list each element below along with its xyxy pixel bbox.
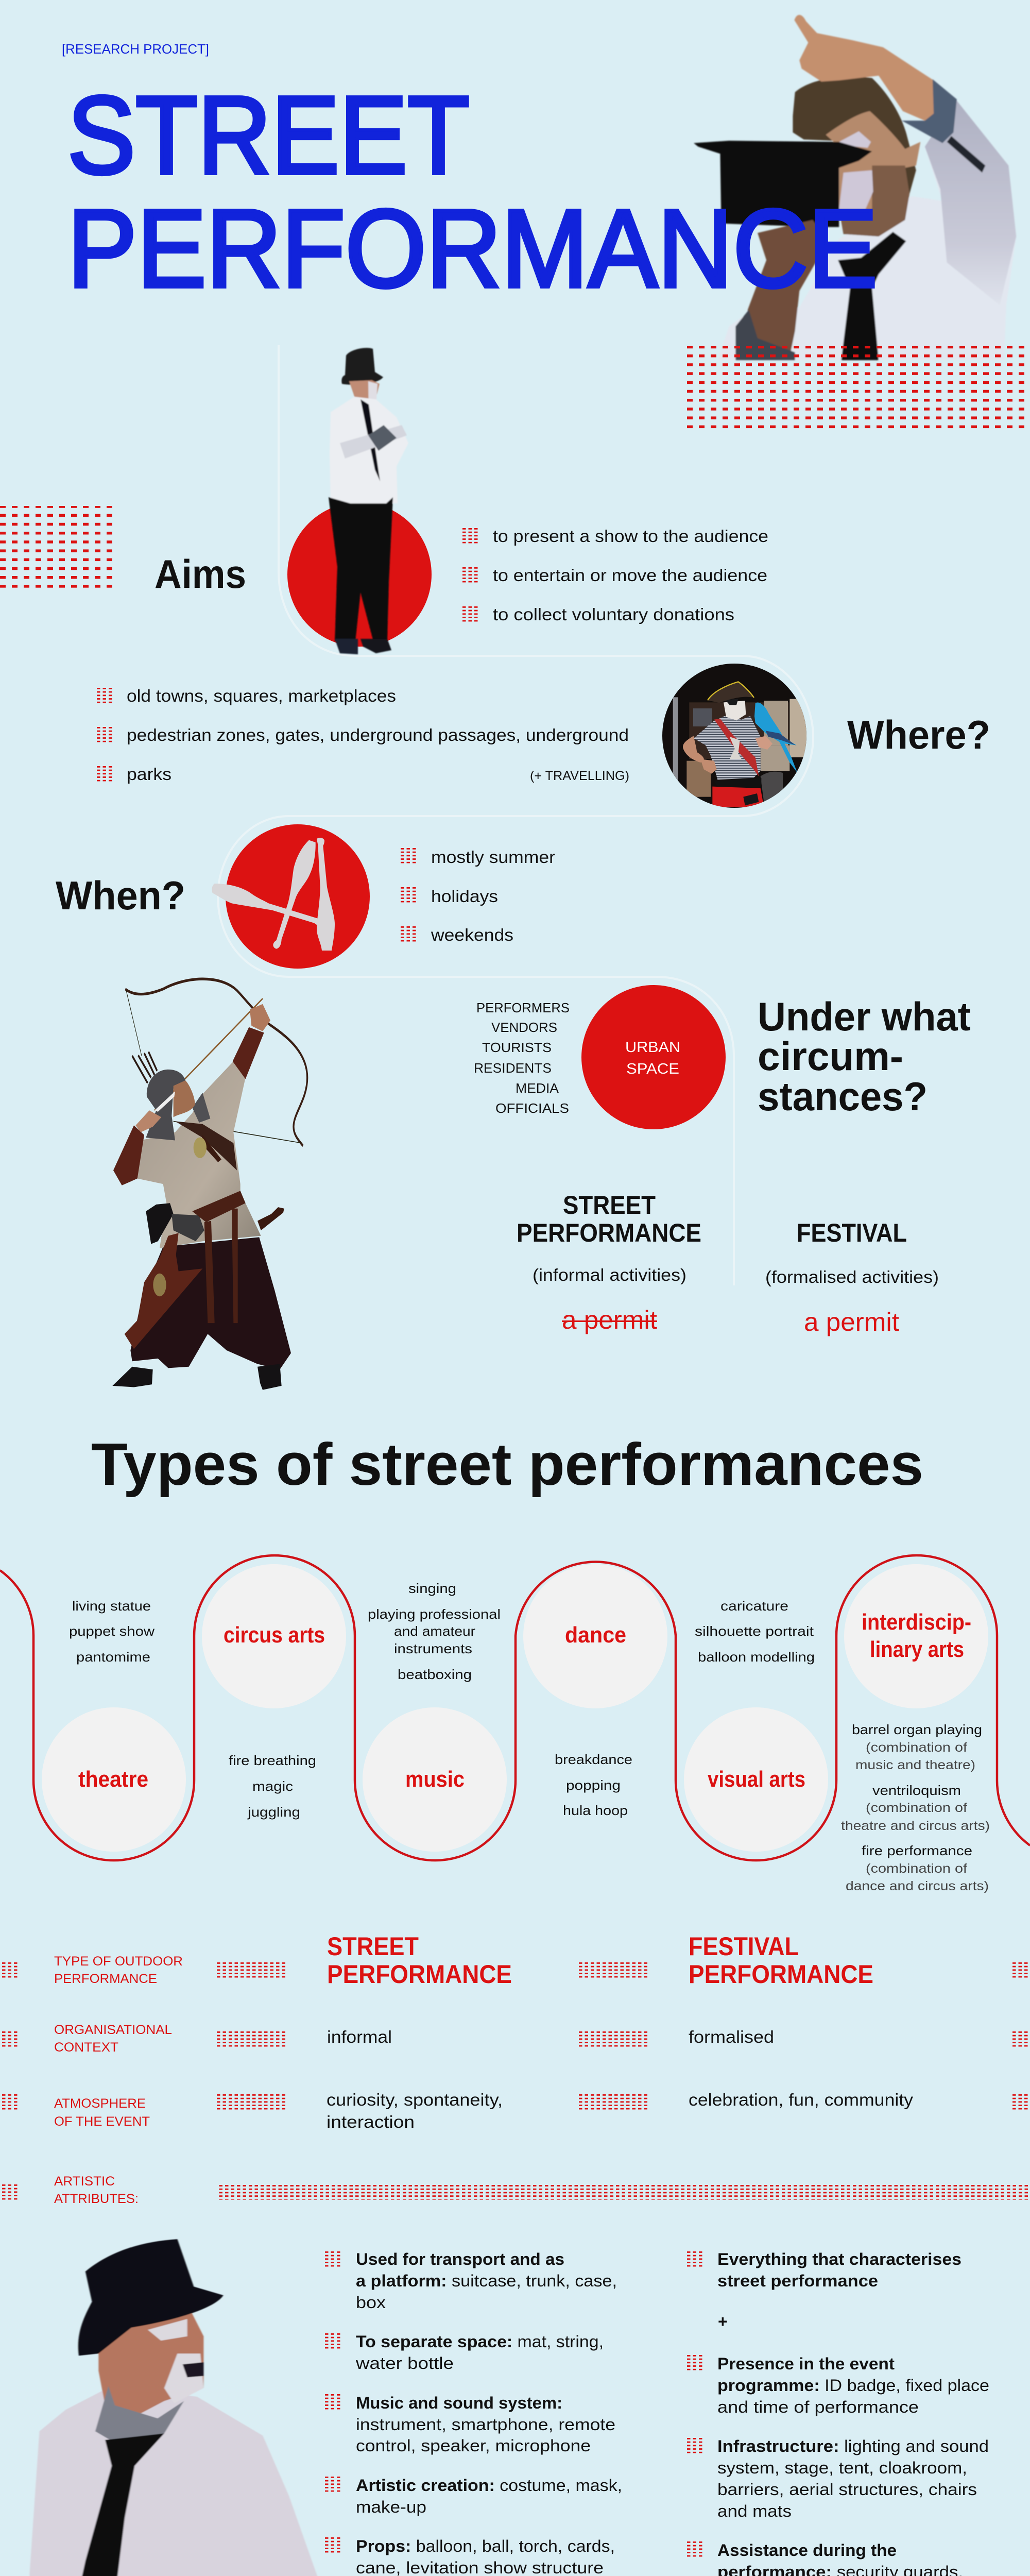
circle: interdisciplinary arts [844,1564,988,1708]
dot pattern: aims [0,506,112,589]
column: street performance [517,1191,701,1334]
list: dance examples: breakdance [555,1752,632,1767]
icon: juggling clubs [212,838,335,951]
circle: interdisciplinary arts: linary arts [870,1637,964,1662]
title: PERFORMANCE [67,187,878,310]
list: street performance artistic attributes: Props: balloon, ball, torch, cards, [356,2537,615,2555]
list: interdisciplinary examples: (combination of [866,1740,967,1755]
heading: aims: Aims [154,551,246,597]
circle: circus arts: circus arts [224,1622,325,1648]
row: atmosphere of the event: celebration, fun, community [689,2090,914,2109]
list: street performance artistic attributes: Artistic creation: costume, mask, [356,2476,622,2495]
list: when: weekends [431,925,513,944]
list: street performance artistic attributes: instrument, smartphone, remote [356,2415,615,2434]
list: music examples: and amateur [394,1623,475,1639]
heading: types of street performances: Types of street performances [91,1431,923,1498]
list: interdisciplinary examples [841,1722,990,1893]
list: festival performance attributes: and mats [717,2502,792,2520]
row: organisational context [2,2023,1028,2055]
list: interdisciplinary examples: music and theatre) [855,1758,975,1772]
panel: when [56,824,555,969]
list: festival performance attributes: Presence in the event [717,2354,895,2373]
list: visual arts examples: balloon modelling [698,1649,815,1665]
list: interdisciplinary examples: barrel organ playing [852,1722,982,1737]
heading: under what circumstances: circum- [758,1033,903,1079]
row: atmosphere of the event: OF THE EVENT [54,2114,150,2129]
list: visual arts examples: caricature [720,1598,788,1614]
row: artistic attributes: ARTISTIC [54,2174,115,2189]
list: street performance artistic attributes: box [356,2293,386,2312]
list: festival performance attributes: programme: ID badge, fixed place [717,2376,989,2395]
list: street performance artistic attributes: make-up [356,2498,426,2516]
list: theatre examples: pantomime [76,1649,150,1665]
list: urban space actors: MEDIA [516,1080,559,1096]
list: street performance artistic attributes: a platform: suitcase, trunk, case, [356,2272,617,2290]
list: street performance artistic attributes: To separate space: mat, string, [356,2332,604,2351]
column: festival: FESTIVAL [797,1218,907,1247]
list: interdisciplinary examples: dance and circus arts) [846,1879,989,1893]
list: theatre examples: living statue [72,1598,151,1614]
list: music examples: beatboxing [398,1667,472,1682]
list: when: holidays [431,887,498,906]
row: artistic attributes: ATTRIBUTES: [54,2192,139,2206]
red circle: urban space [581,985,726,1129]
row: atmosphere of the event: interaction [327,2112,415,2131]
list: aims: to entertain or move the audience [493,566,767,585]
list: where: parks [127,765,171,784]
list: interdisciplinary examples: (combination of [866,1861,967,1876]
row: organisational context: informal [327,2027,392,2046]
list: where [97,686,629,784]
panel: where [97,663,990,810]
red circle: urban space: SPACE [626,1061,679,1077]
photo: standing mime [329,348,408,654]
list: when [401,848,555,944]
list: music examples: instruments [394,1641,472,1656]
column: street performance: a permit [562,1306,657,1334]
list: urban space actors: PERFORMERS [476,1000,570,1015]
row: type of outdoor performance [2,1932,1028,1989]
list: festival performance attributes: and time of performance [717,2398,919,2416]
list: festival performance attributes: Everything that characterises [717,2250,962,2268]
list: street performance artistic attributes: water bottle [355,2354,454,2372]
list: music examples: playing professional [368,1606,501,1622]
row: atmosphere of the event: curiosity, spontaneity, [327,2090,503,2109]
list: dance examples [555,1752,632,1818]
panel: types diagram [0,1555,1030,1893]
list: dance examples: hula hoop [563,1803,628,1818]
list: music examples [368,1581,501,1682]
heading: where: Where? [847,712,990,757]
list: theatre examples [69,1598,154,1665]
list: interdisciplinary examples: ventriloquism [872,1783,961,1798]
dot pattern: top right [681,346,1030,429]
circle: dance: dance [565,1622,626,1648]
list: interdisciplinary examples: theatre and circus arts) [841,1819,990,1833]
circle: theatre: theatre [78,1767,148,1792]
list: urban space actors: OFFICIALS [495,1100,569,1116]
list: urban space actors [474,1000,570,1116]
circle: dance [523,1564,667,1708]
list: dance examples: popping [566,1777,621,1793]
list: when: mostly summer [431,848,555,867]
photo: mime looking away [29,2239,327,2576]
list: where: pedestrian zones, gates, underground passages, underground [127,725,629,744]
list: visual arts examples: silhouette portrait [695,1623,814,1639]
column: festival: a permit [804,1308,899,1336]
row: type of outdoor performance: PERFORMANCE [327,1960,512,1989]
heading: when: When? [56,873,185,918]
row: type of outdoor performance: STREET [327,1932,419,1961]
list: festival performance attributes: street performance [717,2272,878,2290]
photo: archer [112,979,307,1390]
list: street performance artistic attributes [325,2250,641,2576]
photo: performer with top hat [694,15,1016,360]
row: atmosphere of the event [2,2090,1028,2131]
row: organisational context: formalised [689,2027,774,2046]
list: visual arts examples [695,1598,815,1665]
list: festival performance attributes: Assistance during the [717,2541,897,2560]
row: type of outdoor performance: TYPE OF OUTDOOR [54,1954,183,1969]
list: festival performance attributes [687,2250,989,2576]
list: aims: to collect voluntary donations [493,605,734,624]
row: organisational context: ORGANISATIONAL [54,2023,172,2037]
list: where: old towns, squares, marketplaces [127,686,396,705]
list: festival performance attributes: system, stage, tent, cloakroom, [717,2459,967,2477]
list: urban space actors: TOURISTS [482,1040,552,1055]
list: urban space actors: RESIDENTS [474,1060,552,1076]
row: type of outdoor performance: PERFORMANCE [689,1960,873,1989]
list: interdisciplinary examples: fire performance [862,1843,972,1858]
row: artistic attributes [2,2174,1030,2206]
red circle: urban space: URBAN [625,1039,680,1056]
list: circus examples: fire breathing [229,1753,316,1768]
row: atmosphere of the event: ATMOSPHERE [54,2096,146,2111]
heading: under what circumstances: stances? [758,1074,928,1119]
circle: visual arts [684,1707,828,1852]
list: street performance artistic attributes: control, speaker, microphone [356,2436,591,2455]
title: STREET [67,73,470,197]
column: festival [765,1218,939,1336]
row: type of outdoor performance: FESTIVAL [689,1932,799,1961]
list: where: (+ TRAVELLING) [530,769,629,783]
list: aims [462,527,768,624]
red circle with juggling clubs [226,824,370,969]
row: type of outdoor performance: PERFORMANCE [54,1972,157,1986]
list: street performance artistic attributes: Music and sound system: [356,2394,562,2412]
list: festival performance attributes: + [718,2312,728,2331]
row: organisational context: CONTEXT [54,2040,118,2055]
circle: visual arts: visual arts [708,1767,805,1792]
heading: under what circumstances [758,994,971,1119]
list: circus examples [229,1753,316,1820]
circle: theatre [42,1707,186,1852]
list: music examples: singing [408,1581,456,1596]
panel: comparison table [2,1932,1030,2206]
circle: music: music [405,1767,465,1792]
red wave line [0,1555,1030,1860]
list: urban space actors: VENDORS [491,1020,557,1035]
column: street performance: (informal activities) [533,1265,686,1284]
small label: research project: [RESEARCH PROJECT] [62,41,209,57]
list: circus examples: magic [252,1778,293,1794]
list: festival performance attributes: barriers, aerial structures, chairs [717,2480,977,2499]
panel: aims [0,348,768,654]
column: festival: (formalised activities) [765,1267,939,1286]
list: circus examples: juggling [247,1804,300,1820]
red circle: aims [287,502,432,647]
list: festival performance attributes: Infrastructure: lighting and sound [717,2437,989,2455]
list: interdisciplinary examples: (combination of [866,1801,967,1815]
panel: under what circumstances [474,985,971,1336]
list: theatre examples: puppet show [69,1623,154,1639]
title [67,73,878,310]
circle: music [363,1707,507,1852]
circle: circus arts [202,1564,346,1708]
list: aims: to present a show to the audience [493,527,768,546]
decorative connector line [218,345,813,1285]
column: street performance: PERFORMANCE [517,1218,701,1247]
list: street performance artistic attributes: Used for transport and as [356,2250,564,2268]
heading: under what circumstances: Under what [758,994,971,1039]
photo: pirate with parrot [661,663,809,810]
column: street performance: STREET [563,1191,656,1219]
circle: interdisciplinary arts: interdiscip- [862,1609,971,1635]
